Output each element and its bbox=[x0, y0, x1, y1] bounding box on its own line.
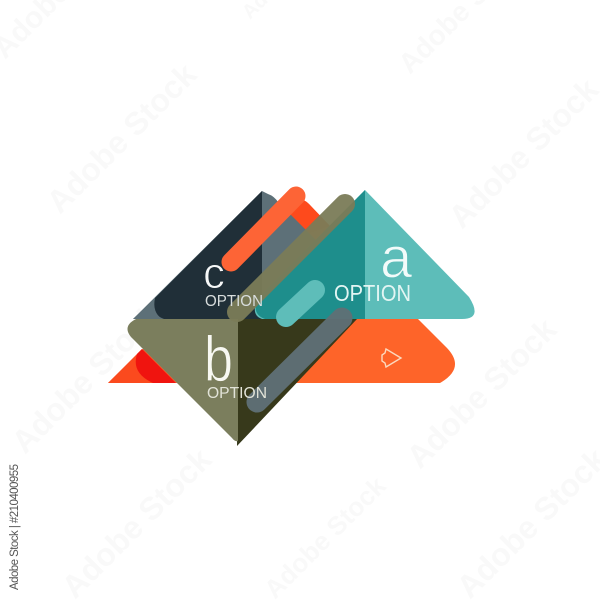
panel: option a teal triangle bbox=[255, 190, 475, 319]
panel: red-orange triangle with arrow bbox=[108, 200, 455, 383]
letter c: c bbox=[203, 249, 225, 298]
letter a: a bbox=[380, 226, 413, 290]
panel: option c dark triangle bbox=[133, 191, 345, 319]
pill: light teal bbox=[286, 290, 315, 317]
watermark pattern: Adobe Stock bbox=[39, 56, 203, 220]
panel: option b olive triangle bbox=[127, 319, 357, 446]
icon: outlined arrow bbox=[382, 349, 401, 367]
watermark pattern: Adobe Stock bbox=[399, 311, 563, 475]
watermark pattern: Adobe Stock bbox=[4, 296, 168, 460]
label: option c: OPTION bbox=[205, 293, 263, 310]
pill: slate grey bbox=[257, 318, 342, 402]
pill: olive bbox=[237, 204, 345, 312]
pill: orange bbox=[231, 196, 296, 262]
letter b: b bbox=[204, 323, 233, 395]
label: option b: OPTION bbox=[207, 385, 267, 402]
label: option a: OPTION bbox=[334, 280, 411, 306]
side credit: Adobe Stock | #210400955 bbox=[9, 464, 21, 590]
